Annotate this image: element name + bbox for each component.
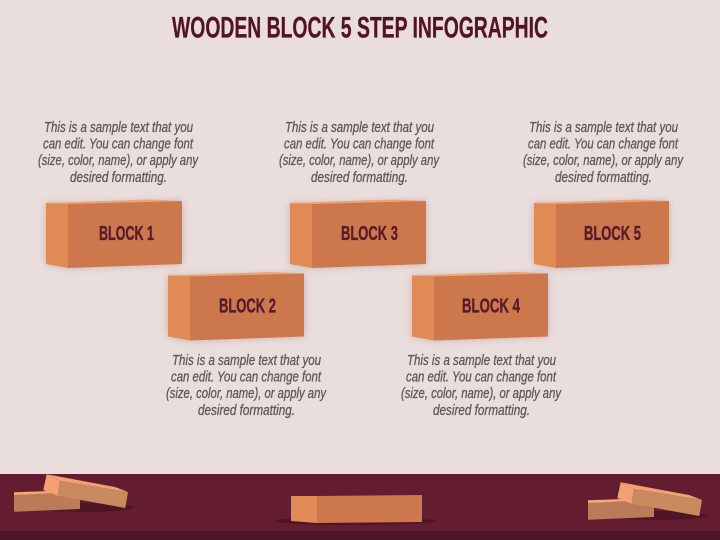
text block: block 2 description: (size, color, name), or apply any (166, 386, 327, 402)
block 3 (290, 200, 426, 268)
text block: block 4 description: This is a sample text that you (407, 353, 556, 369)
text block: block 3 description (279, 120, 440, 186)
text block: block 1 description (38, 120, 199, 186)
text block: block 1 description: desired formatting. (70, 170, 167, 186)
text block: block 1 description: can edit. You can change font (43, 136, 194, 152)
block 5: BLOCK 5 (584, 222, 641, 245)
text block: block 2 description: can edit. You can change font (171, 370, 322, 386)
text block: block 2 description (166, 353, 327, 419)
text block: block 1 description: (size, color, name), or apply any (38, 153, 199, 169)
text block: block 4 description: (size, color, name), or apply any (401, 386, 562, 402)
block 2 (168, 272, 304, 340)
block 4 (412, 272, 548, 340)
text block: block 3 description: can edit. You can change font (284, 136, 435, 152)
text block: block 3 description: (size, color, name), or apply any (279, 153, 440, 169)
text block: block 5 description: can edit. You can change font (528, 136, 679, 152)
floor (0, 474, 720, 540)
text block: block 4 description (401, 353, 562, 419)
brick pile: left (14, 474, 134, 512)
text block: block 2 description: This is a sample text that you (172, 353, 321, 369)
text block: block 4 description: can edit. You can change font (406, 370, 557, 386)
block 1 (46, 200, 182, 268)
block 3: BLOCK 3 (341, 222, 398, 245)
text block: block 5 description (523, 120, 684, 186)
text block: block 5 description: This is a sample text that you (529, 120, 678, 136)
text block: block 3 description: This is a sample text that you (285, 120, 434, 136)
text block: block 2 description: desired formatting. (198, 403, 295, 419)
brick: center flat (275, 495, 436, 525)
brick pile: right (588, 482, 708, 520)
block 4: BLOCK 4 (462, 294, 520, 318)
text block: block 3 description: desired formatting. (311, 170, 408, 186)
text block: block 5 description: desired formatting. (555, 170, 652, 186)
block 1: BLOCK 1 (99, 222, 154, 245)
text block: block 1 description: This is a sample text that you (44, 120, 193, 136)
block 5 (534, 200, 669, 268)
block 2: BLOCK 2 (219, 294, 276, 318)
text block: block 4 description: desired formatting. (433, 403, 530, 419)
